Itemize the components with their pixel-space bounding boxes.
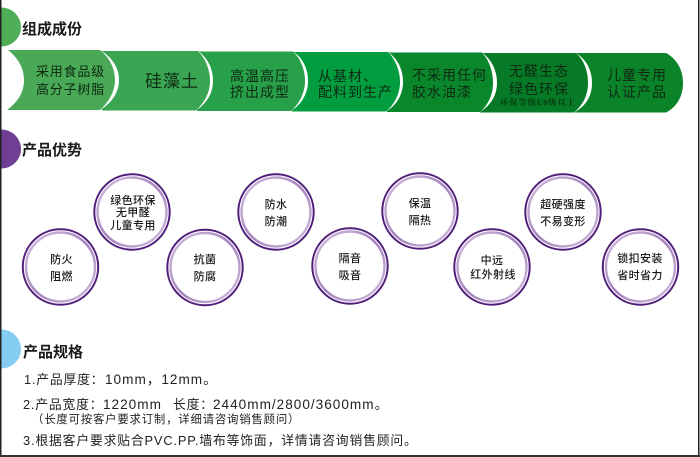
section marker: composition	[2, 8, 21, 46]
segment: 无醛生态	[480, 53, 592, 112]
advantage: 中远红外射线	[454, 229, 530, 305]
specification list	[23, 372, 418, 448]
advantage: 防水防潮: 防水	[265, 197, 287, 211]
advantage: 隔音吸音: 隔音	[339, 251, 361, 265]
segment: 无醛生态: 绿色环保	[509, 81, 569, 97]
section marker: specifications	[2, 330, 21, 368]
heading: advantages: 产品优势	[22, 142, 82, 159]
advantage: 绿色环保	[94, 174, 170, 250]
advantage: 抗菌防腐	[167, 230, 243, 305]
advantage: 隔音吸音	[312, 228, 388, 304]
segment: 采用食品级: 高分子树脂	[36, 82, 105, 97]
advantage: 绿色环保: 无甲醛	[116, 205, 150, 219]
advantage: 绿色环保: 儿童专用	[110, 218, 156, 232]
segment: 高温高压: 挤出成型	[230, 84, 290, 100]
advantage: 绿色环保: 绿色环保	[110, 193, 156, 207]
advantage: 防水防潮	[238, 174, 314, 250]
advantage: 锁扣安装	[603, 229, 678, 305]
advantage: 保温隔热	[382, 173, 458, 249]
advantage: 超硬强度	[525, 174, 601, 250]
specification list: 10mm，12mm。	[105, 372, 218, 387]
advantage: 防火阻燃: 防火	[50, 252, 73, 266]
advantage: 隔音吸音: 吸音	[339, 268, 361, 282]
segment: 儿童专用: 认证产品	[607, 84, 667, 100]
advantage: 超硬强度: 不易变形	[540, 214, 586, 228]
specification list: 长度：	[173, 397, 214, 412]
specification list: 1.产品厚度：	[24, 372, 104, 387]
advantage: 保温隔热: 隔热	[409, 213, 431, 227]
advantage: 防水防潮: 防潮	[265, 214, 287, 228]
advantage: 抗菌防腐: 抗菌	[194, 252, 216, 266]
segment: 采用食品级	[7, 50, 119, 110]
segment: 从基材: 从基材、	[318, 68, 378, 84]
advantage: 锁扣安装: 锁扣安装	[617, 251, 663, 265]
advantage: 防火阻燃: 阻燃	[50, 269, 73, 283]
segment: 无醛生态: 无醛生态	[509, 63, 569, 79]
advantage: 抗菌防腐: 防腐	[194, 269, 216, 283]
specification list: 2440mm/2800/3600mm。	[213, 397, 389, 412]
advantage: 超硬强度: 超硬强度	[540, 197, 586, 211]
segment: 高温高压: 高温高压	[230, 68, 290, 84]
specification list: 3.根据客户要求贴合PVC.PP.墙布等饰面，详情请咨询销售顾问。	[23, 433, 418, 448]
segment: 硅藻土	[102, 51, 213, 110]
segment: 从基材	[292, 52, 403, 112]
advantage: 保温隔热: 保温	[409, 196, 431, 210]
segment: 硅藻土: 硅藻土	[145, 72, 199, 91]
advantage: 中远红外射线: 中远	[481, 253, 503, 267]
specification list: 2.产品宽度：	[23, 397, 103, 412]
segment: 不采用任何	[387, 52, 497, 112]
process ribbon	[7, 50, 683, 112]
section marker: advantages	[2, 130, 21, 168]
segment: 从基材: 配料到生产	[318, 84, 393, 100]
segment: 高温高压	[197, 52, 308, 111]
advantage: 防火阻燃	[23, 229, 98, 305]
segment: 无醛生态: 环保等级E0级以上	[500, 97, 576, 107]
segment: 不采用任何: 不采用任何	[412, 67, 487, 83]
specification list: 1220mm	[103, 397, 162, 412]
advantage: 中远红外射线: 红外射线	[470, 267, 516, 281]
specification list: （长度可按客户要求订制，详细请咨询销售顾问）	[32, 412, 300, 426]
heading: specifications: 产品规格	[23, 343, 83, 361]
segment: 不采用任何: 胶水油漆	[412, 84, 472, 100]
segment: 儿童专用: 儿童专用	[607, 67, 667, 83]
advantage: 锁扣安装: 省时省力	[617, 268, 663, 282]
segment: 采用食品级: 采用食品级	[36, 64, 105, 79]
heading: composition: 组成成份	[22, 20, 82, 38]
segment: 儿童专用	[575, 53, 683, 112]
